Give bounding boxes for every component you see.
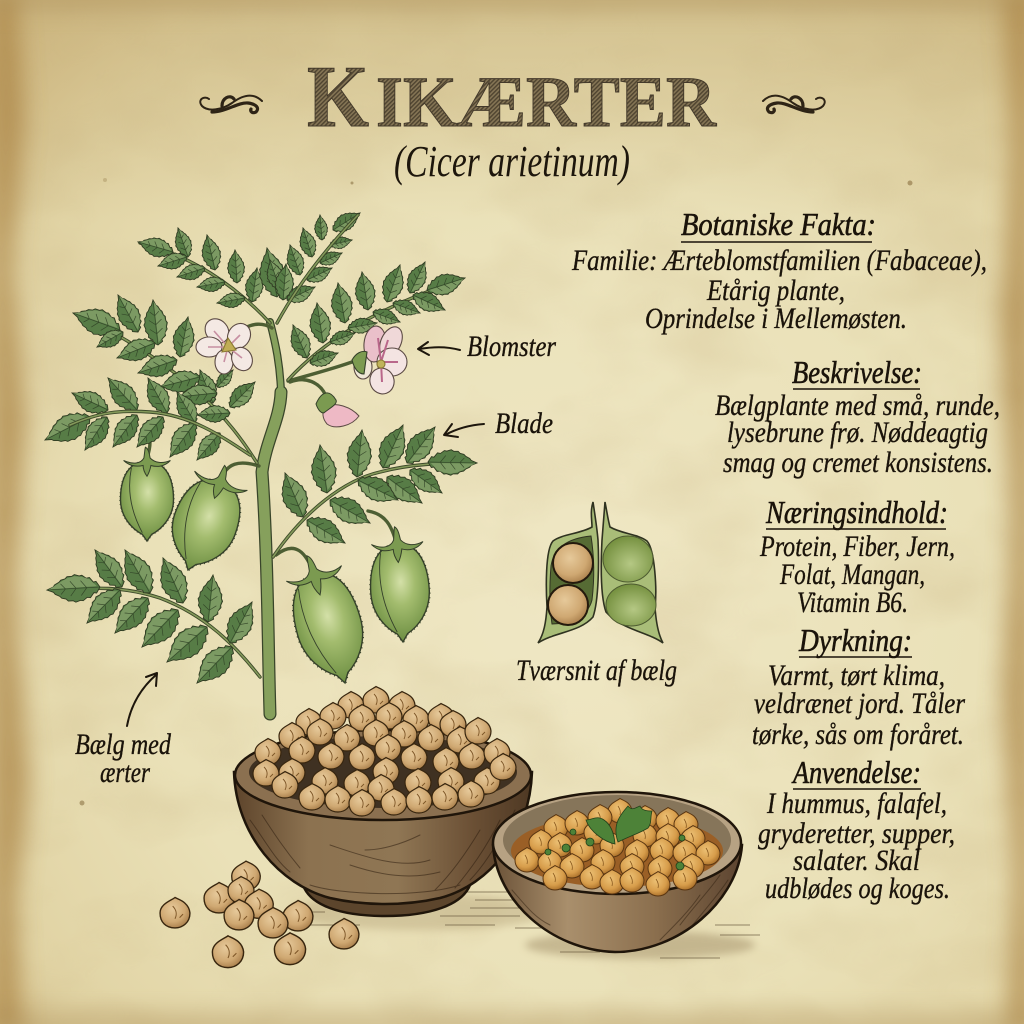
right half xyxy=(601,502,663,643)
flourish left xyxy=(200,96,262,113)
text block: Næringsindhold: Næringsindhold: xyxy=(765,494,948,530)
text block: Beskrivelse xyxy=(715,354,1000,479)
leaf: top centre cluster xyxy=(254,245,318,307)
label: Blomster xyxy=(418,330,556,363)
pod 2 xyxy=(158,455,256,581)
label: Blade xyxy=(444,407,553,440)
text block: Anvendelse: salater. Skal xyxy=(793,844,920,877)
chickpea plant xyxy=(39,206,477,714)
wood grain xyxy=(250,810,515,894)
large bowl of chickpeas xyxy=(234,686,532,916)
text block: Anvendelse: I hummus, falafel, xyxy=(766,787,947,820)
cross-section pod xyxy=(538,502,663,643)
bowl rim xyxy=(235,730,531,820)
label: Bælg med ærter: Bælg med xyxy=(75,728,172,761)
text block: Næringsindhold: Protein, Fiber, Jern, xyxy=(759,530,955,563)
text block: Botaniske Fakta: Oprindelse i Mellemøsten. xyxy=(645,302,907,335)
text block: Beskrivelse: Beskrivelse: xyxy=(792,354,922,390)
bowl interior xyxy=(249,736,517,808)
loose chickpeas xyxy=(160,861,359,968)
text block: Næringsindhold: Folat, Mangan, xyxy=(779,558,925,591)
bowl grain xyxy=(512,875,728,940)
pod stalks xyxy=(147,324,397,574)
text block: Botaniske Fakta: Botaniske Fakta: xyxy=(681,206,876,242)
main stem xyxy=(262,322,281,714)
chickpea pile xyxy=(253,686,516,816)
text block: Næringsindhold: Vitamin B6. xyxy=(797,586,908,619)
small bowl of cooked chickpeas xyxy=(493,792,742,952)
text block: Anvendelse: udblødes og koges. xyxy=(765,872,950,905)
text block: Anvendelse xyxy=(758,754,955,905)
pods xyxy=(120,447,432,692)
label: Bælg med ærter xyxy=(75,673,172,789)
subtitle: (Cicer arietinum) xyxy=(394,137,630,186)
leaf: right middle xyxy=(273,420,477,557)
leaf: top right xyxy=(277,206,364,323)
text block: Botaniske Fakta: Etårig plante, xyxy=(706,274,845,307)
label: Tværsnit af bælg: Tværsnit af bælg xyxy=(516,654,677,687)
text block: Dyrkning: tørke, sås om foråret. xyxy=(752,718,964,751)
flower bud xyxy=(316,393,359,427)
text block: Anvendelse: Anvendelse: xyxy=(791,754,921,790)
flower: left xyxy=(196,314,256,374)
text block: Anvendelse: gryderetter, supper, xyxy=(758,817,955,850)
text block: Dyrkning xyxy=(752,622,965,751)
bowl foot xyxy=(303,885,470,916)
stew chickpeas xyxy=(515,798,720,896)
label: Blomster: Blomster xyxy=(467,330,556,363)
pod 4 xyxy=(367,525,432,644)
leaf: upper right xyxy=(284,258,468,380)
text block: Dyrkning: veldrænet jord. Tåler xyxy=(754,687,965,720)
left half with seeds xyxy=(538,502,598,643)
pod 1 xyxy=(120,447,174,541)
bowl body xyxy=(234,772,532,904)
parsley garnish xyxy=(545,806,685,870)
leaf: bottom left xyxy=(46,543,263,692)
title: K xyxy=(307,49,369,146)
leaf: middle left xyxy=(39,370,250,464)
text block: Dyrkning: Varmt, tørt klima, xyxy=(768,659,945,692)
bowl body xyxy=(493,845,742,952)
label: Bælg med ærter: ærter xyxy=(100,756,150,789)
leaf: upper left xyxy=(135,225,270,323)
pod 3 xyxy=(278,546,376,692)
flourish right xyxy=(763,96,825,113)
bowl interior xyxy=(503,795,731,885)
flower: right xyxy=(352,323,407,397)
bowl rim xyxy=(493,792,741,894)
ground shadows xyxy=(290,892,760,959)
text block: Dyrkning: Dyrkning: xyxy=(798,622,912,658)
title: IKÆRTER xyxy=(376,62,717,142)
leaf: upper left long xyxy=(69,290,262,466)
title xyxy=(307,49,717,146)
label: Blade: Blade xyxy=(495,407,553,440)
text block: Næringsindhold xyxy=(759,494,955,619)
text block: Botaniske Fakta xyxy=(571,206,987,335)
